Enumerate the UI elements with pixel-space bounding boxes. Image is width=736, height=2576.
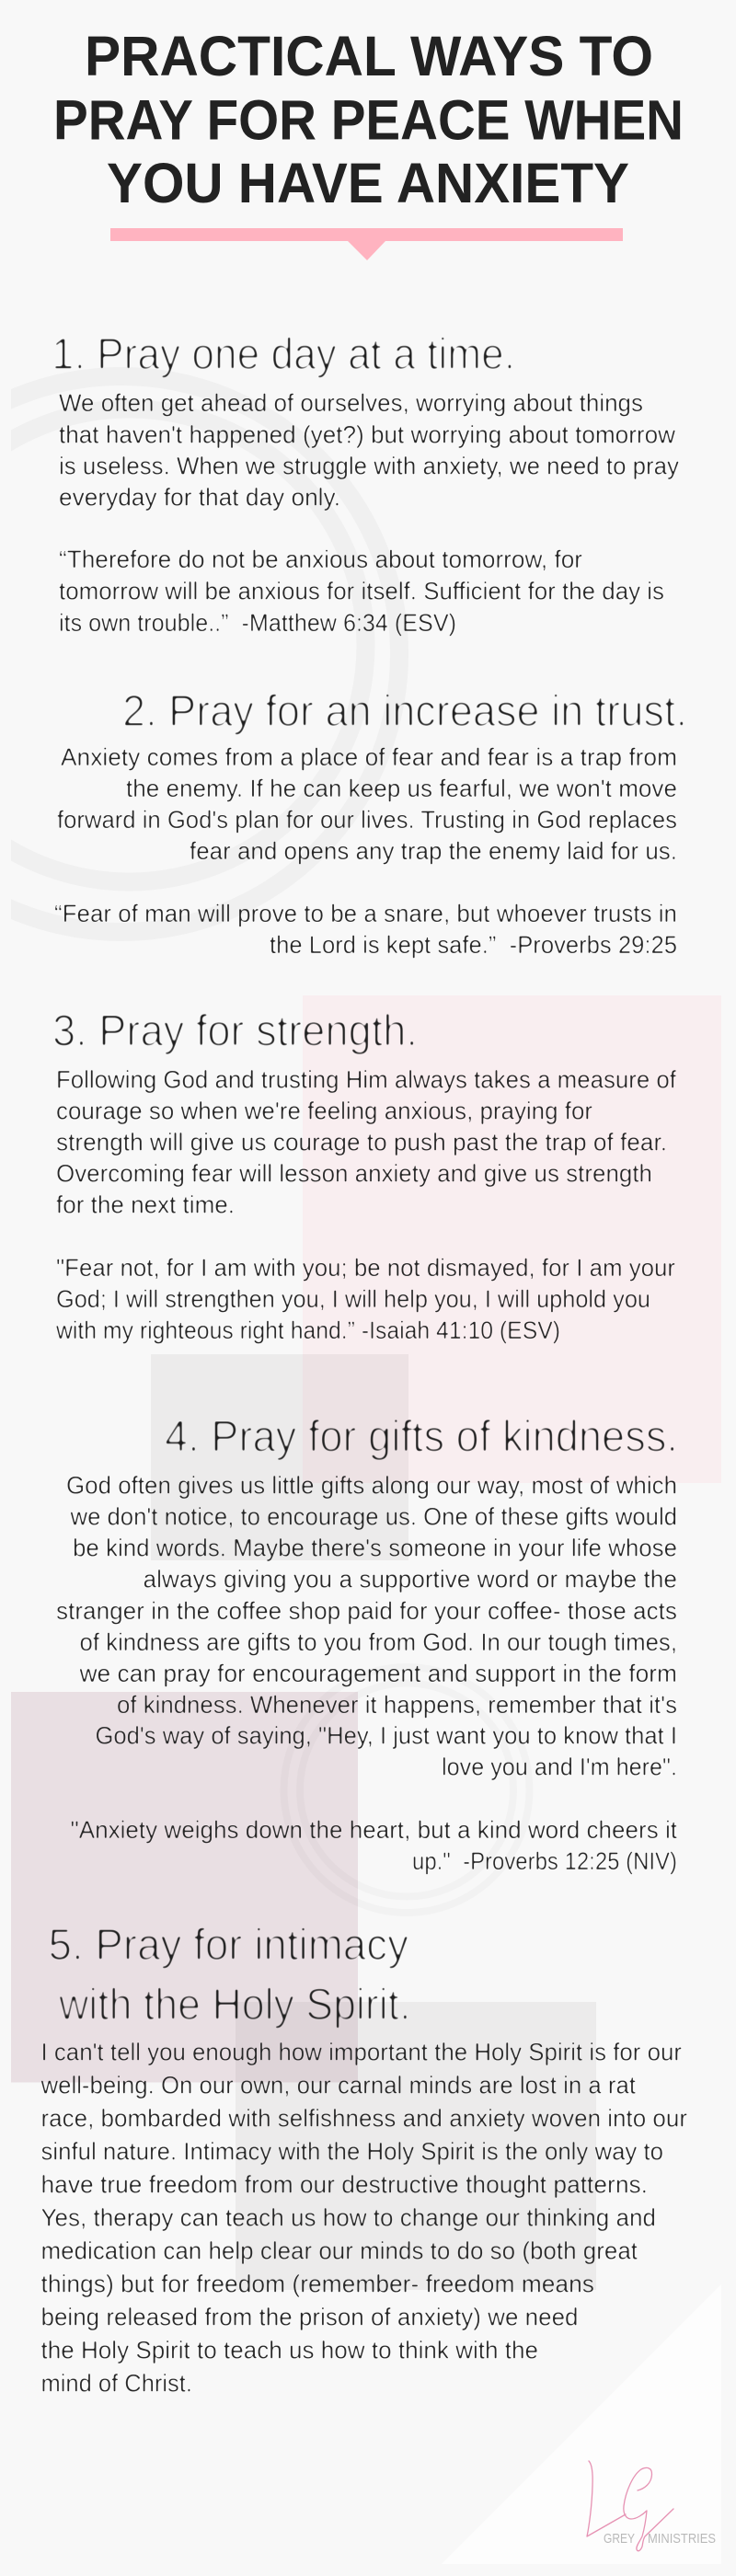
logo wordmark: MINISTRIES — [648, 2532, 716, 2547]
body text 3: for the next time. — [56, 1190, 235, 1218]
body text 5: well-being. On our own, our carnal minds are lost in a rat — [40, 2072, 636, 2099]
title divider with pointer — [110, 228, 623, 260]
heading 5 — [48, 1921, 410, 2030]
body text 1: its own trouble..” -Matthew 6:34 (ESV) — [59, 609, 456, 637]
body text 3: courage so when we're feeling anxious, praying for — [56, 1097, 592, 1124]
body text 4: "Anxiety weighs down the heart, but a kind word cheers it — [70, 1816, 677, 1844]
body text 5: the Holy Spirit to teach us how to think with the — [40, 2337, 538, 2364]
body text 3: "Fear not, for I am with you; be not dismayed, for I am your — [56, 1254, 675, 1282]
title: PRACTICAL WAYS TO — [85, 25, 653, 88]
heading 3: 3. Pray for strength. — [52, 1006, 418, 1056]
section 5 — [40, 1921, 687, 2398]
body text 4: love you and I'm here". — [442, 1754, 677, 1781]
body text 4: we can pray for encouragement and support in the form — [79, 1660, 677, 1687]
body text 5: I can't tell you enough how important the Holy Spirit is for our — [40, 2039, 682, 2066]
logo wordmark: GREY — [604, 2532, 635, 2547]
body text 1: “Therefore do not be anxious about tomorrow, for — [59, 546, 582, 573]
body text 4: God often gives us little gifts along our way, most of which — [66, 1472, 677, 1500]
body text 1 — [59, 389, 679, 637]
body text 1: is useless. When we struggle with anxiety, we need to pray — [59, 453, 679, 480]
logo monogram — [587, 2461, 673, 2551]
decorative concentric rings, section 4 — [283, 1667, 530, 1913]
body text 3: with my righteous right hand.” -Isaiah 41:10 (ESV) — [55, 1317, 560, 1344]
body text 1: that haven't happened (yet?) but worrying about tomorrow — [59, 421, 675, 449]
body text 3: God; I will strengthen you, I will help you, I will uphold you — [56, 1285, 650, 1313]
body text 2 — [54, 743, 677, 959]
body text 4: God's way of saying, "Hey, I just want you to know that I — [96, 1722, 677, 1750]
body text 5: sinful nature. Intimacy with the Holy Spirit is the only way to — [40, 2138, 663, 2166]
decorative grey rectangle, section 4 — [151, 1354, 408, 1560]
body text 1: We often get ahead of ourselves, worrying about things — [59, 389, 643, 417]
body text 3: Overcoming fear will lesson anxiety and give us strength — [56, 1159, 652, 1187]
title: PRAY FOR PEACE WHEN — [53, 88, 684, 153]
body text 2: the Lord is kept safe.” -Proverbs 29:25 — [270, 931, 677, 959]
body text 5: medication can help clear our minds to do so (both great — [40, 2237, 638, 2265]
decorative mauve rectangle — [11, 1692, 358, 2083]
logo: LG Grey Ministries — [587, 2461, 716, 2551]
body text 5: have true freedom from our destructive thought patterns. — [40, 2171, 648, 2199]
body text 4: stranger in the coffee shop paid for your coffee- those acts — [56, 1597, 677, 1625]
body text 2: “Fear of man will prove to be a snare, but whoever trusts in — [54, 900, 677, 927]
body text 5: race, bombarded with selfishness and anxiety woven into our — [40, 2105, 687, 2133]
section 2 — [54, 687, 687, 959]
section 4 — [56, 1413, 678, 1875]
heading 4: 4. Pray for gifts of kindness. — [165, 1413, 678, 1461]
decorative white triangle, bottom right — [442, 2284, 721, 2564]
body text 2: Anxiety comes from a place of fear and fear is a trap from — [61, 743, 677, 771]
decorative grey rectangle, section 5 — [236, 2002, 596, 2290]
title — [53, 25, 684, 215]
body text 3 — [55, 1065, 676, 1344]
title: YOU HAVE ANXIETY — [107, 152, 629, 215]
body text 4: of kindness. Whenever it happens, remember that it's — [117, 1691, 677, 1719]
body text 2: fear and opens any trap the enemy laid for us. — [190, 837, 677, 865]
body text 4: up." -Proverbs 12:25 (NIV) — [412, 1847, 677, 1875]
section 1 — [52, 330, 679, 637]
body text 1: tomorrow will be anxious for itself. Sufficient for the day is — [59, 578, 664, 605]
body text 4: be kind words. Maybe there's someone in your life whose — [73, 1535, 677, 1562]
section 3 — [52, 1006, 676, 1344]
logo wordmark — [604, 2532, 716, 2547]
body text 5 — [40, 2039, 687, 2398]
decorative concentric rings, upper left — [0, 376, 399, 932]
body text 1: everyday for that day only. — [59, 484, 340, 512]
body text 2: forward in God's plan for our lives. Trusting in God replaces — [57, 806, 677, 834]
body text 3: strength will give us courage to push past the trap of fear. — [56, 1128, 667, 1156]
heading 5: with the Holy Spirit. — [58, 1981, 411, 2030]
heading 1: 1. Pray one day at a time. — [52, 330, 515, 379]
body text 4 — [56, 1472, 677, 1875]
body text 4: always giving you a supportive word or maybe the — [144, 1566, 677, 1593]
body text 5: things) but for freedom (remember- freedom means — [40, 2271, 594, 2298]
decorative pink rectangle — [303, 995, 721, 1483]
body text 5: Yes, therapy can teach us how to change our thinking and — [40, 2204, 656, 2232]
heading 5: 5. Pray for intimacy — [48, 1921, 408, 1970]
body text 2: the enemy. If he can keep us fearful, we won't move — [126, 775, 677, 802]
heading 2: 2. Pray for an increase in trust. — [122, 687, 687, 736]
body text 4: of kindness are gifts to you from God. In our tough times, — [79, 1628, 677, 1656]
body text 5: being released from the prison of anxiety) we need — [40, 2304, 578, 2331]
body text 3: Following God and trusting Him always takes a measure of — [56, 1065, 676, 1093]
body text 4: we don't notice, to encourage us. One of these gifts would — [70, 1503, 677, 1531]
body text 5: mind of Christ. — [40, 2370, 192, 2398]
